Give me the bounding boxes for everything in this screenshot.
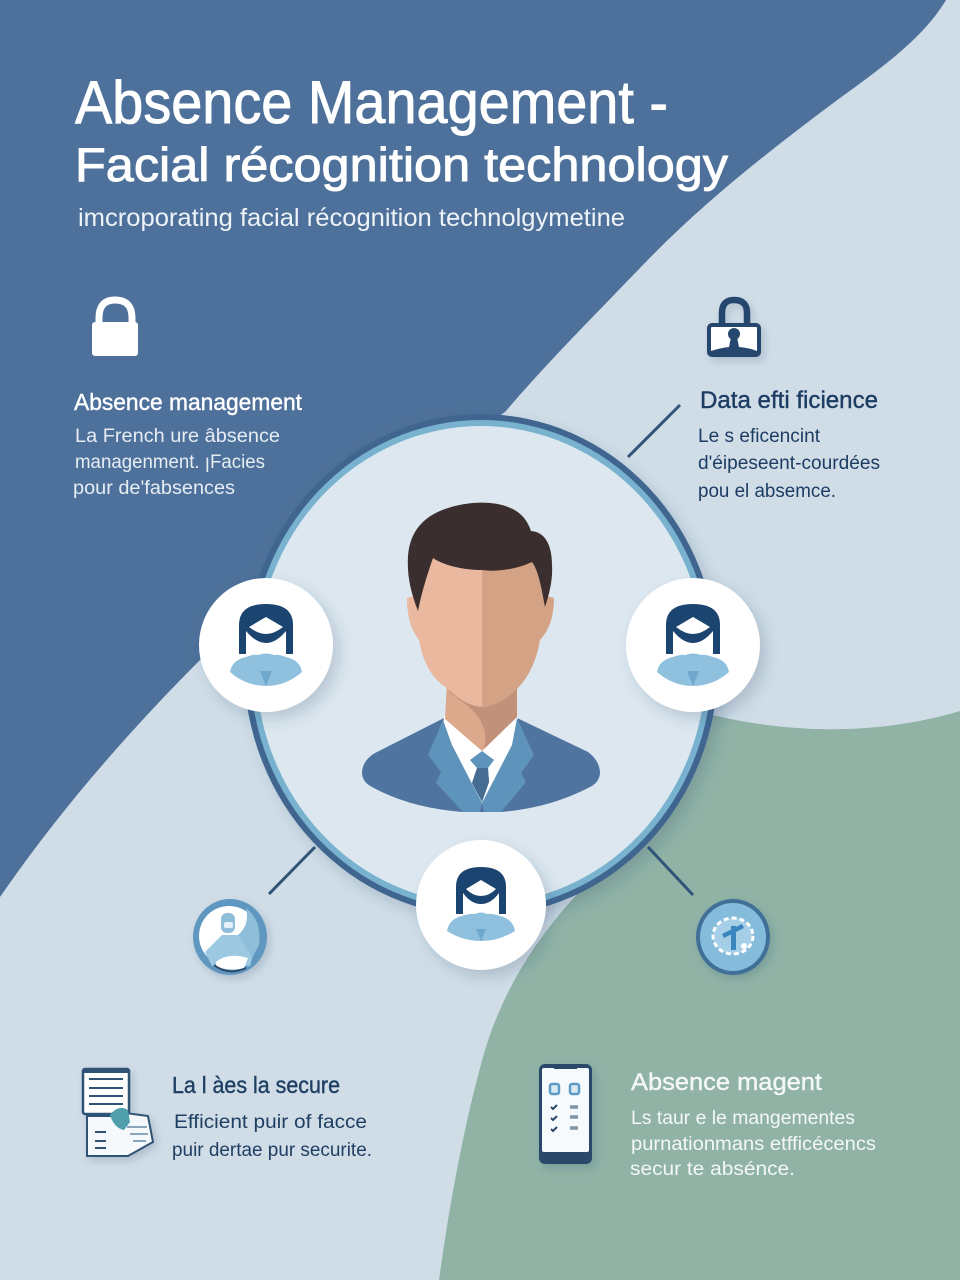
white node: bottom person <box>416 840 546 970</box>
text block: absence magent: purnationmans etfficécencs <box>631 1134 876 1155</box>
text block: absence management <box>73 389 303 499</box>
text block: data efficience: Data efti ficience <box>700 387 878 414</box>
text block: data efficience: pou el absemce. <box>698 481 836 502</box>
central man portrait <box>362 503 600 812</box>
white node: right person <box>626 578 760 712</box>
text block: la secure: puir dertae pur securite. <box>172 1140 372 1161</box>
text block: absence management: pour de'fabsences <box>73 478 235 499</box>
connector line: top right <box>628 405 680 457</box>
title <box>75 69 729 191</box>
white node: left person <box>199 578 333 712</box>
face right <box>482 540 554 707</box>
text block: data efficience <box>698 387 880 502</box>
shirt <box>440 714 524 804</box>
text block: la secure <box>172 1072 372 1161</box>
neck <box>445 680 517 751</box>
text block: absence magent: secur te absénce. <box>630 1159 795 1180</box>
icon: dark padlock <box>709 300 759 355</box>
text block: absence magent <box>630 1069 876 1180</box>
face left <box>407 540 482 707</box>
icon: small person badge <box>193 899 267 975</box>
text block: absence management: Absence management <box>74 389 303 415</box>
text block: absence management: managenment. ꞁFacies <box>75 452 265 473</box>
icon: documents <box>83 1069 153 1156</box>
text block: data efficience: d'éipeseent-courdées <box>698 453 880 474</box>
icon: phone <box>539 1064 592 1164</box>
background: green wave <box>439 711 960 1280</box>
text block: la secure: Efficient puir of facce <box>174 1112 367 1133</box>
left lapel <box>428 720 482 812</box>
suit <box>362 718 600 812</box>
title: Absence Management - <box>75 69 668 136</box>
text block: absence management: La French ure âbsence <box>75 426 280 447</box>
right lapel <box>482 718 534 812</box>
text block: absence magent: Ls taur e le mangementes <box>631 1108 855 1129</box>
text block: data efficience: Le s eficencint <box>698 426 821 447</box>
text block: absence magent: Absence magent <box>631 1069 822 1096</box>
subtitle: imcroporating facial récognition technolgymetine <box>78 204 625 232</box>
connector line: bottom right <box>648 847 693 895</box>
background: dark blue wave <box>0 0 946 897</box>
icon: small gear badge <box>696 899 770 975</box>
title: Facial récognition technology <box>75 138 729 191</box>
tie <box>470 751 494 802</box>
central circle <box>244 414 718 916</box>
hair <box>408 503 552 611</box>
icon: white padlock <box>92 300 138 356</box>
text block: la secure: La l àes la secure <box>172 1072 340 1098</box>
connector line: bottom left <box>269 847 315 894</box>
